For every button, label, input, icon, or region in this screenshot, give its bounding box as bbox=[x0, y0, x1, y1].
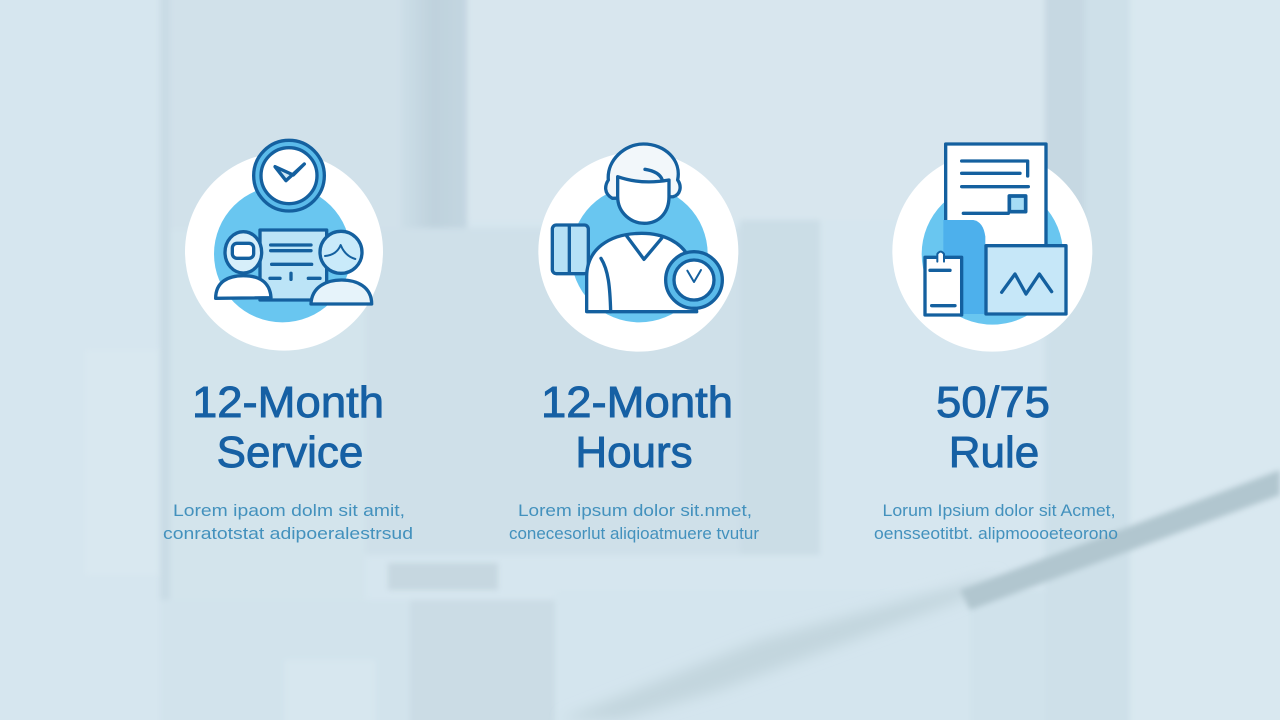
heading: 50/75 Rule: 50/75 bbox=[936, 378, 1050, 427]
text block: description: Lorem ipaom dolm sit amit, bbox=[173, 501, 405, 520]
heading: 12-Month Hours: 12-Month bbox=[541, 378, 733, 427]
column 2: 12-Month Hours bbox=[509, 144, 759, 543]
text block: description bbox=[874, 501, 1118, 543]
heading: 12-Month Service bbox=[192, 378, 384, 477]
heading: 12-Month Service: 12-Month bbox=[192, 378, 384, 427]
text block: description bbox=[509, 501, 759, 543]
text block: description: Lorum Ipsium dolor sit Acmet, bbox=[882, 501, 1116, 520]
text block: description: conecesorlut aliqioatmuere tvutur bbox=[509, 524, 759, 543]
text block: description bbox=[163, 501, 413, 543]
icon: clock over two people at a screen bbox=[185, 140, 383, 351]
text block: description: conratotstat adipoeralestrsud bbox=[163, 524, 413, 543]
column 3: 50/75 Rule bbox=[874, 144, 1118, 543]
text block: description: Lorem ipsum dolor sit.nmet, bbox=[518, 501, 752, 520]
heading: 50/75 Rule bbox=[936, 378, 1050, 477]
icon: document, clipboard and chart bbox=[892, 144, 1092, 352]
icon: person with book and clock bbox=[538, 144, 738, 352]
column 1: 12-Month Service bbox=[163, 140, 413, 543]
heading: 50/75 Rule: Rule bbox=[949, 428, 1039, 477]
heading: 12-Month Hours bbox=[541, 378, 733, 477]
heading: 12-Month Service: Service bbox=[217, 428, 363, 477]
heading: 12-Month Hours: Hours bbox=[575, 428, 693, 477]
text block: description: oensseotitbt. alipmoooeteorono bbox=[874, 524, 1118, 543]
